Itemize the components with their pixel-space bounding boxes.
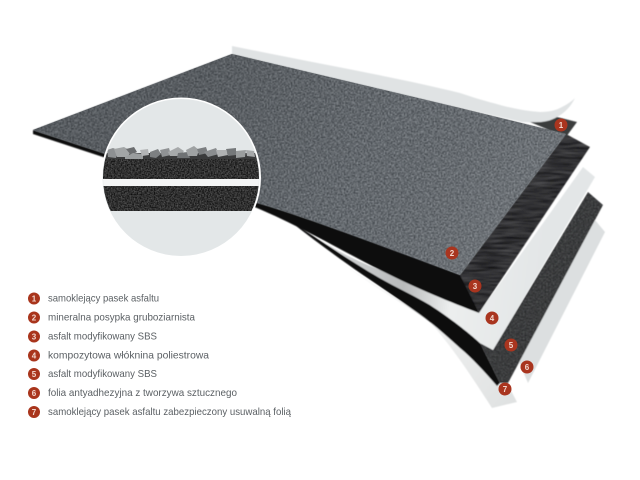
layer 5: modified asphalt underside band: [291, 222, 500, 386]
badge 1: [554, 118, 568, 132]
layer 1: white film behind top edge: [232, 46, 575, 123]
badge 2: 2: [450, 249, 455, 258]
legend item 1: samoklejący pasek asfaltu: [48, 292, 159, 304]
legend item 3: asfalt modyfikowany SBS: [48, 330, 157, 342]
badge 6: 6: [525, 363, 530, 372]
layer 7: bottom release film: [340, 262, 517, 408]
legend item 7: samoklejący pasek asfaltu zabezpieczony usuwalną folią: [48, 406, 291, 418]
legend item 3: 3: [32, 332, 37, 342]
cross-section: upper asphalt: [100, 158, 265, 179]
layer 6: anti-adhesive film: [519, 220, 605, 383]
cross-section: white film: [100, 179, 265, 186]
mineral granulate texture: [33, 54, 566, 275]
badge 5: 5: [509, 341, 514, 350]
legend item 6: 6: [32, 389, 37, 398]
legend item 4: 4: [32, 352, 37, 360]
badge 2: [446, 246, 458, 260]
badge 3: [468, 280, 482, 292]
legend item 1: 1: [32, 294, 37, 304]
legend item 6: folia antyadhezyjna z tworzywa sztucznego: [48, 387, 237, 399]
layered roofing sheet diagram: [33, 46, 605, 408]
layer number badges: [446, 118, 568, 396]
mineral granulate shading: [33, 54, 566, 275]
layer 5: modified SBS asphalt: [480, 192, 603, 383]
layer 3: modified SBS asphalt: [33, 130, 590, 313]
badge 4: [486, 312, 498, 324]
magnifier lens: cross-section: [100, 98, 265, 258]
legend: [28, 292, 291, 418]
badge 4: 4: [490, 314, 495, 323]
cross-section: lower asphalt: [100, 186, 265, 211]
layer 4: composite polyester fleece: [310, 167, 595, 350]
badge 7: [498, 382, 512, 396]
legend item 2: mineralna posypka gruboziarnista: [48, 312, 195, 324]
legend item 5: 5: [32, 370, 37, 379]
legend item 4: kompozytowa włóknina poliestrowa: [48, 350, 209, 362]
badge 3: 3: [473, 282, 478, 291]
legend item 2: 2: [32, 314, 37, 322]
layer 2: mineral granulate base: [33, 54, 566, 275]
cross-section: mineral stones: [105, 146, 260, 159]
badge 6: [520, 360, 534, 374]
layer 1: self-adhesive asphalt strip: [530, 117, 577, 137]
badge 5: [504, 338, 518, 352]
badge 1: 1: [559, 121, 564, 130]
legend item 7: 7: [32, 408, 37, 417]
badge 7: 7: [503, 385, 508, 394]
legend item 5: asfalt modyfikowany SBS: [48, 368, 157, 380]
